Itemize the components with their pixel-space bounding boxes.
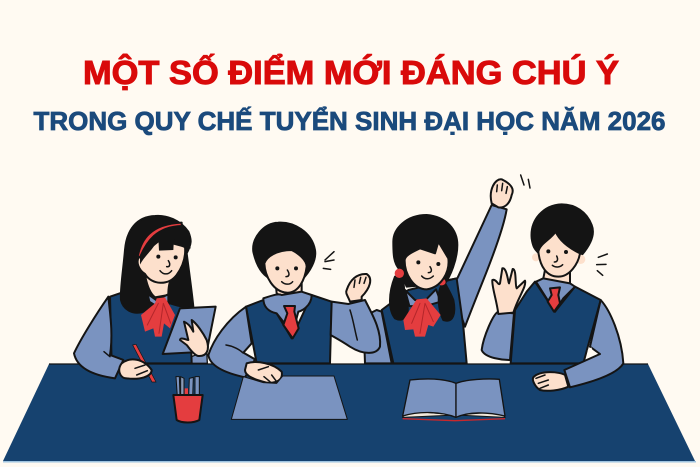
subtitle: TRONG QUY CHẾ TUYỂN SINH ĐẠI HỌC NĂM 2026 — [34, 106, 666, 136]
student: boy waving — [482, 175, 623, 391]
title: MỘT SỐ ĐIỂM MỚI ĐÁNG CHÚ Ý — [83, 53, 619, 91]
open book — [403, 379, 505, 421]
sheet of paper on desk — [231, 376, 347, 419]
student: boy with tie and raised fist — [208, 223, 380, 383]
student: girl with headband — [74, 216, 216, 382]
desk — [3, 364, 696, 462]
pencil cup — [173, 377, 203, 422]
student: girl with pigtails raising hand — [363, 179, 513, 363]
